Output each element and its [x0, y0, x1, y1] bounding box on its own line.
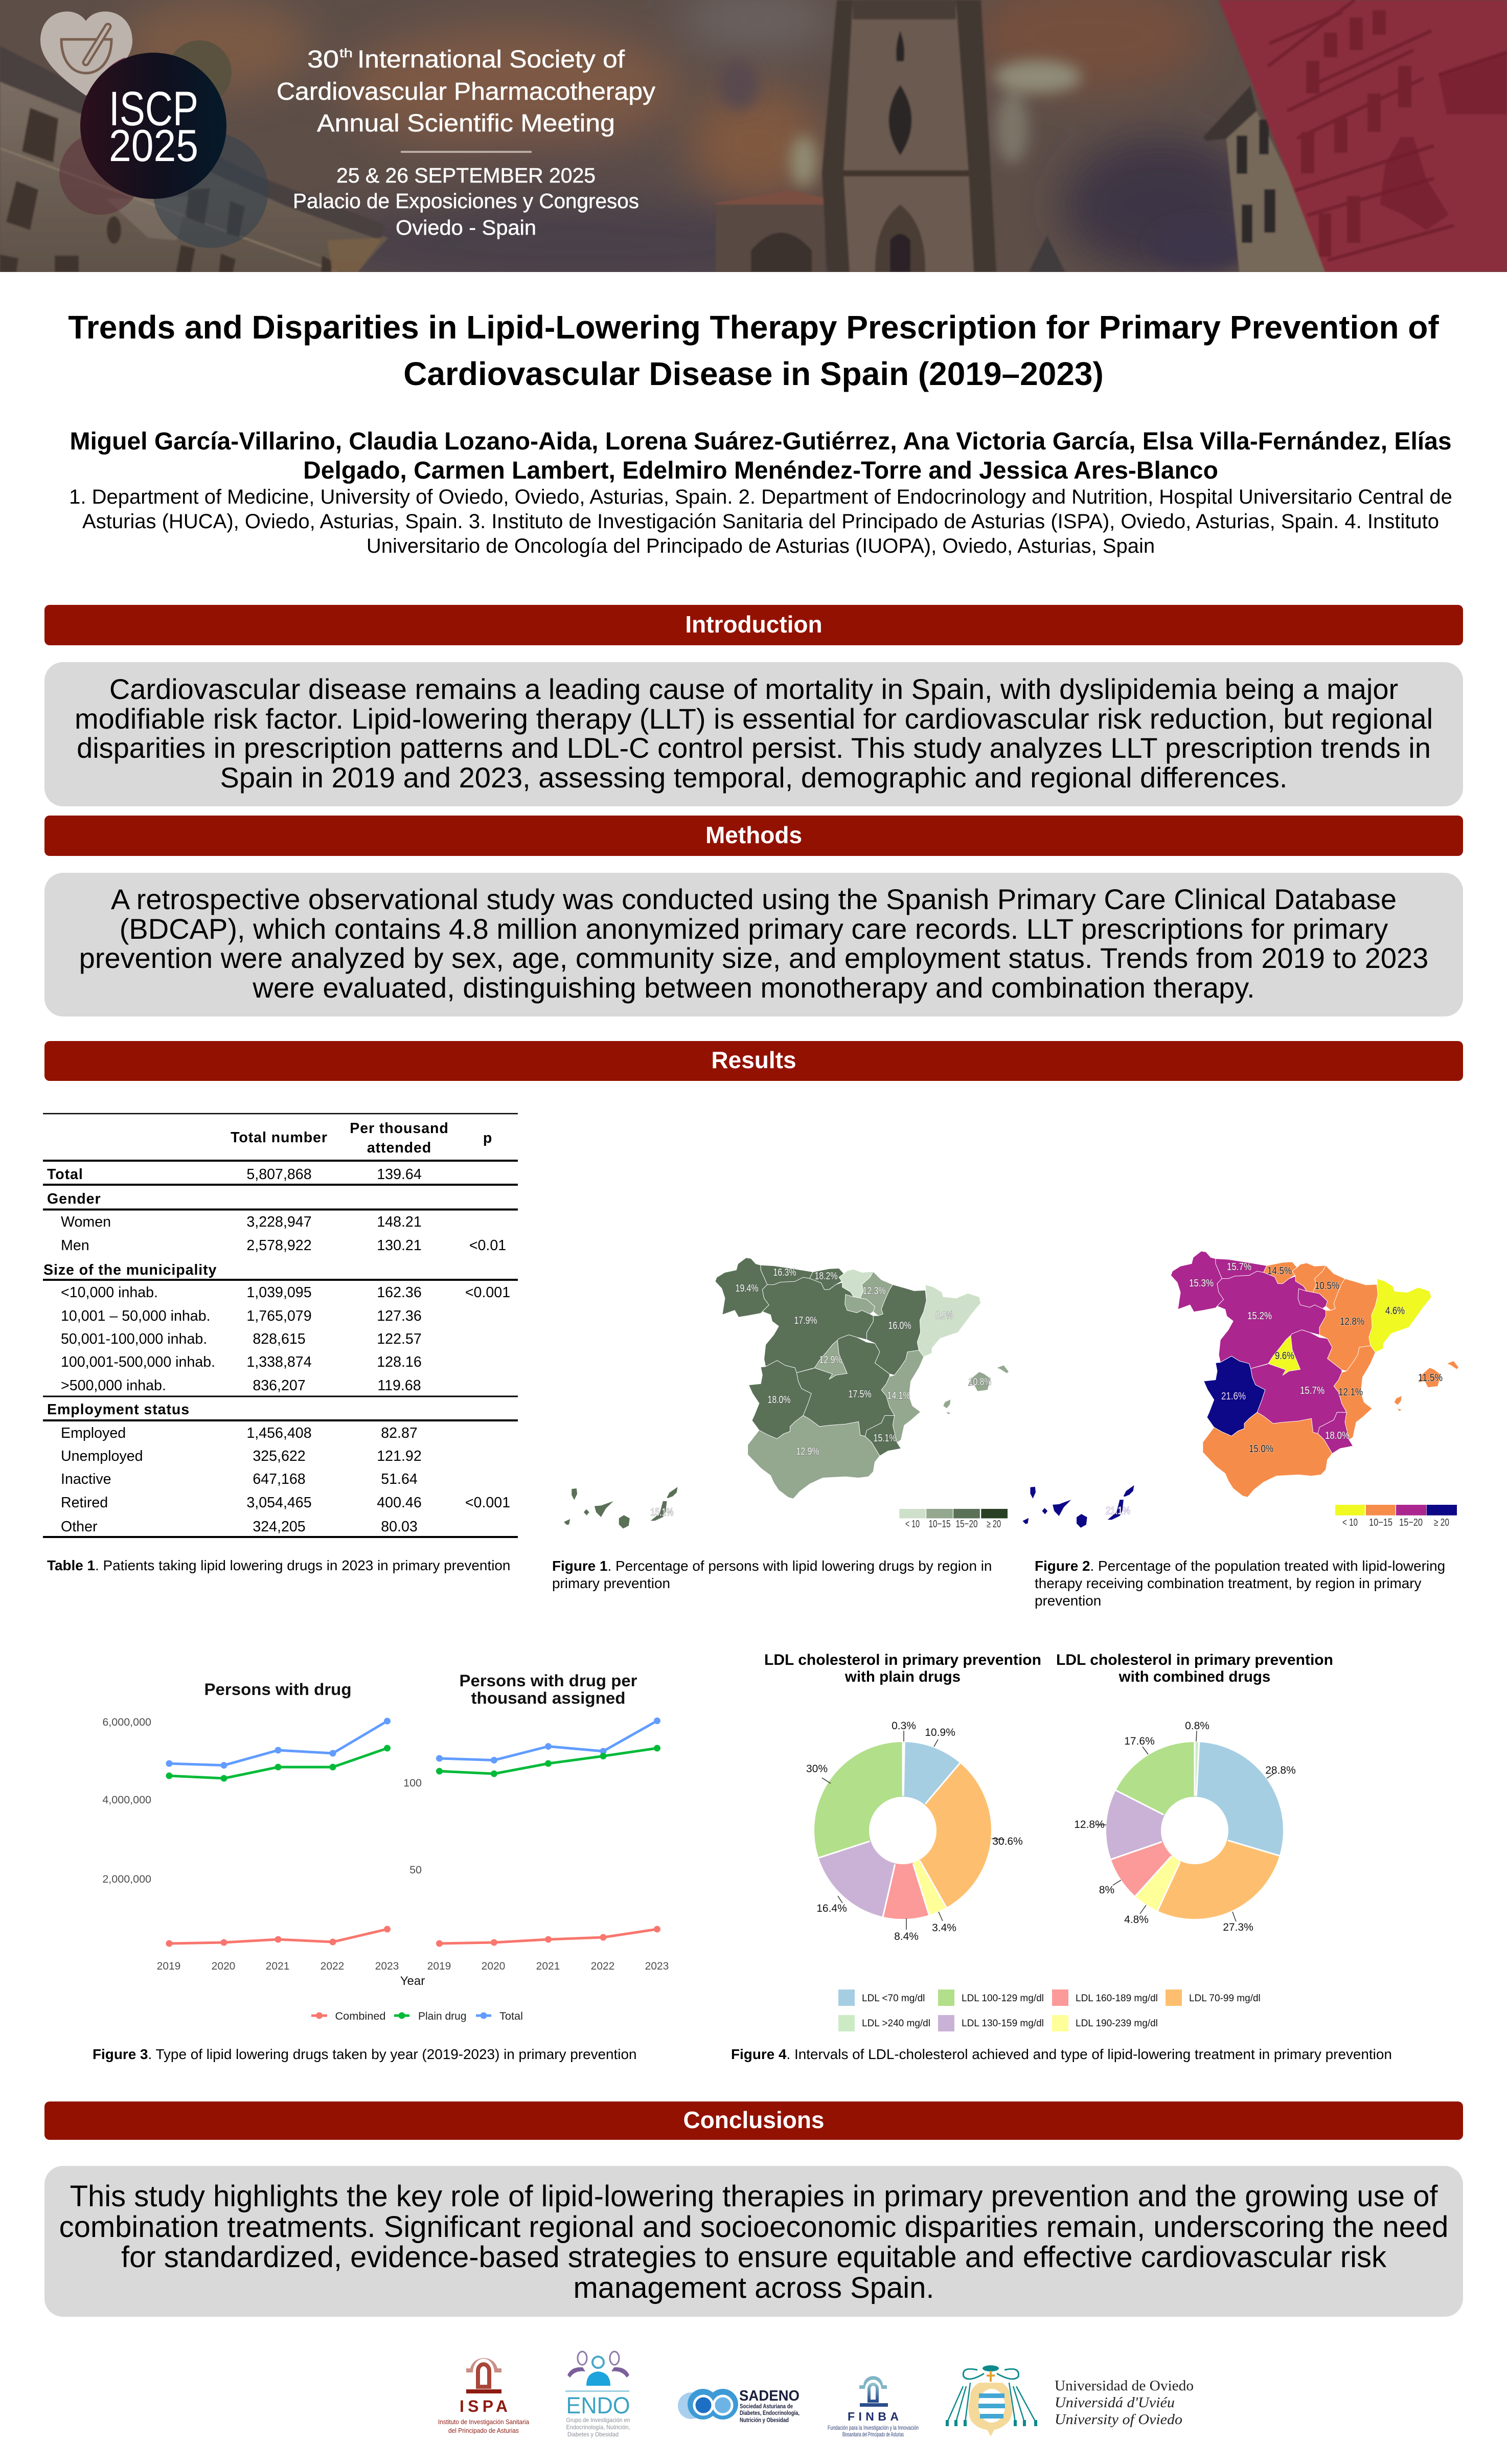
donut labels: plain drugs: 3.4% — [932, 1922, 956, 1934]
table 1: 3,054,465 — [246, 1495, 312, 1511]
table 1: Total — [47, 1166, 83, 1183]
logo: FINBA: Biosanitaria del Principado de Asturias — [842, 2431, 904, 2438]
value labels: 10.5% — [1315, 1280, 1339, 1292]
table 1: 119.68 — [377, 1377, 421, 1394]
figure 4: donut charts — [764, 1652, 1333, 2031]
region: Asturias — [1216, 1259, 1267, 1279]
logo text: ISCP — [109, 82, 198, 136]
value labels: 15.7% — [1300, 1385, 1325, 1396]
logo: ENDO: ENDO — [566, 2392, 630, 2418]
donut labels: plain drugs: 8.4% — [894, 1931, 919, 1942]
heading: introduction — [44, 605, 1463, 645]
value labels: 15.1% — [873, 1433, 897, 1444]
value labels: 12.9% — [796, 1446, 819, 1457]
table 1: 127.36 — [377, 1308, 422, 1324]
map legend: 10−15 — [928, 1519, 951, 1530]
donut labels: combined drugs: 27.3% — [1223, 1922, 1253, 1933]
logo: ENDO: Grupo de Investigación en — [566, 2416, 630, 2424]
ISCP 2025 logo — [40, 11, 268, 248]
table 1: Other — [61, 1519, 98, 1535]
value labels — [1106, 1261, 1443, 1517]
region: Cantabria — [1264, 1262, 1297, 1283]
map legend — [1335, 1505, 1457, 1528]
caption: figure 2: prevention — [1035, 1593, 1101, 1609]
table 1: 400.46 — [377, 1495, 422, 1511]
value labels: 15.1% — [650, 1507, 674, 1518]
logo: ENDO: Diabetes y Obesidad — [567, 2431, 619, 2438]
donut labels: plain drugs: 30.6% — [992, 1836, 1023, 1847]
y axis labels: 2,000,000 — [102, 1873, 151, 1885]
chart legend: Total — [499, 2010, 523, 2022]
value labels: 18.0% — [768, 1394, 791, 1406]
region: Madrid — [814, 1340, 847, 1380]
value labels: 8.9% — [935, 1310, 953, 1321]
table 1: Employed — [61, 1425, 126, 1441]
authors — [70, 428, 1452, 484]
table 1: Men — [61, 1237, 89, 1254]
value labels: 12.3% — [863, 1285, 886, 1297]
x axis labels: 2019 — [157, 1960, 180, 1972]
panel: methods text: A retrospective observational study was conducted using the Spanish Primary Care Clinical Database — [111, 883, 1397, 915]
donut legend — [838, 1990, 1261, 2031]
value labels: 16.3% — [773, 1267, 796, 1278]
value labels: 11.5% — [1418, 1372, 1443, 1384]
map legend: 15−20 — [1399, 1517, 1423, 1528]
caption: figure 1 — [552, 1557, 992, 1592]
heading: introduction: Introduction — [685, 611, 823, 638]
y axis labels: 100 — [403, 1777, 422, 1789]
y axis labels: 4,000,000 — [102, 1794, 151, 1806]
donut labels: combined drugs: 8% — [1099, 1884, 1114, 1896]
affiliations: Universitario de Oncología del Principado de Asturias (IUOPA), Oviedo, Asturias, Spain — [367, 535, 1155, 557]
donut labels: combined drugs: 17.6% — [1124, 1735, 1155, 1747]
conference details: 30 — [307, 46, 339, 73]
x axis labels — [157, 1960, 669, 1972]
left building — [0, 46, 389, 286]
table 1: 324,205 — [253, 1519, 306, 1535]
table 1: attended — [367, 1140, 431, 1156]
table 1: 100,001-500,000 inhab. — [61, 1354, 215, 1370]
value labels: 15.2% — [1247, 1310, 1272, 1322]
table 1: 1,765,079 — [246, 1308, 312, 1324]
region: Basque Country — [1292, 1263, 1326, 1293]
map legend: 15−20 — [956, 1519, 977, 1530]
conference details: th — [339, 47, 353, 60]
region: Asturias — [761, 1265, 813, 1284]
conference details: Palacio de Exposiciones y Congresos — [293, 189, 639, 213]
donut labels: plain drugs: 0.3% — [892, 1720, 916, 1732]
region: Aragon — [866, 1284, 926, 1375]
x axis labels: 2022 — [591, 1960, 614, 1972]
logo text — [109, 82, 198, 171]
title — [68, 309, 1439, 392]
map legend: < 10 — [1342, 1517, 1358, 1528]
region: Extremadura — [1204, 1356, 1265, 1436]
logo: SADENO: SADENO — [739, 2388, 800, 2404]
caption: figure 2: therapy receiving combination treatment, by region in primary — [1035, 1575, 1422, 1591]
heading: methods — [44, 816, 1463, 856]
authors: Delgado, Carmen Lambert, Edelmiro Menéndez-Torre and Jessica Ares-Blanco — [303, 457, 1218, 484]
caption: figure 1: Figure 1. Percentage of persons with lipid lowering drugs by region in — [552, 1558, 992, 1574]
region: Andalusia — [1203, 1412, 1332, 1497]
region: Canary Islands — [1022, 1485, 1134, 1528]
logo: University of Oviedo crest: Universidad de Oviedo — [1055, 2378, 1194, 2394]
heading: methods: Methods — [705, 822, 802, 848]
panel: conclusions text: This study highlights the key role of lipid-lowering therapies in primary prevention and the growing use of — [70, 2180, 1437, 2213]
figure 3: line charts — [102, 1671, 669, 2022]
panel: methods text: prevention were analyzed by sex, age, community size, and employment status. Trends from 2019 to 2023 — [79, 942, 1428, 974]
region: La Rioja — [845, 1295, 875, 1314]
region: Navarra — [1313, 1265, 1345, 1310]
chart title: plain drugs: LDL cholesterol in primary prevention — [764, 1652, 1041, 1668]
logo: SADENO — [678, 2388, 800, 2424]
donut legend: LDL 160-189 mg/dl — [1076, 1993, 1158, 2004]
chart title: persons with drug: Persons with drug — [204, 1680, 352, 1699]
table 1: 2,578,922 — [246, 1237, 312, 1254]
donut legend: LDL 70-99 mg/dl — [1189, 1993, 1261, 2004]
logo: University of Oviedo crest: University of Oviedo — [1055, 2412, 1182, 2428]
table 1: Women — [61, 1214, 111, 1230]
logo: SADENO: Diabetes, Endocrinología, — [740, 2409, 800, 2416]
logo: SADENO: Sociedad Asturiana de — [740, 2403, 793, 2410]
donut: combined drugs — [1134, 1769, 1255, 1892]
chart title: per thousand: Persons with drug per — [459, 1671, 637, 1690]
chart title: combined drugs — [1056, 1652, 1333, 1685]
value labels: 15.7% — [1227, 1261, 1251, 1273]
donut labels: combined drugs: 28.8% — [1265, 1765, 1296, 1776]
region: Balearic Islands — [1395, 1361, 1458, 1411]
region: Galicia — [715, 1258, 769, 1317]
region: Castilla y Leon — [762, 1277, 873, 1373]
axis title: year: Year — [400, 1974, 425, 1988]
region: Basque Country — [839, 1269, 873, 1298]
table 1: Inactive — [61, 1471, 111, 1487]
table 1: 828,615 — [253, 1331, 306, 1347]
value labels: 15.3% — [1189, 1278, 1214, 1289]
table 1: <0.001 — [465, 1495, 510, 1511]
table 1: Unemployed — [61, 1448, 143, 1464]
panel: introduction text: disparities in prescription patterns and LDL-C control persist. This study analyzes LLT prescription trends in — [77, 732, 1431, 764]
panel: introduction text: Spain in 2019 and 2023, assessing temporal, demographic and regional differences. — [220, 761, 1287, 794]
donut labels: plain drugs: 16.4% — [816, 1903, 847, 1914]
panel: conclusions text — [44, 2166, 1463, 2317]
table 1: 162.36 — [377, 1284, 422, 1301]
logo text: 2025 — [109, 120, 198, 171]
table 1: 647,168 — [253, 1471, 306, 1487]
table 1: 121.92 — [377, 1448, 422, 1464]
chart title: combined drugs: with combined drugs — [1118, 1668, 1270, 1685]
panel: conclusions text: management across Spain. — [573, 2271, 934, 2304]
caption: figure 1: primary prevention — [552, 1575, 670, 1591]
x axis labels: 2019 — [427, 1960, 451, 1972]
affiliations: 1. Department of Medicine, University of Oviedo, Oviedo, Asturias, Spain. 2. Department of Endocrinology and Nutrition, Hospital Universitario Central de — [69, 486, 1452, 508]
heading: results: Results — [711, 1047, 796, 1073]
logo: SADENO: Nutrición y Obesidad — [740, 2416, 789, 2424]
conference details: International Society of — [357, 46, 625, 73]
region: Galicia — [1171, 1251, 1224, 1312]
caption: figure 2: Figure 2. Percentage of the population treated with lipid-lowering — [1035, 1558, 1445, 1574]
table 1: 1,456,408 — [246, 1425, 312, 1441]
right building — [1203, 86, 1325, 272]
conference details: Annual Scientific Meeting — [317, 110, 615, 137]
red overlay facade — [1219, 0, 1507, 272]
panel: introduction text: modifiable risk factor. Lipid-lowering therapy (LLT) is essential for cardiovascular risk reduction, but regional — [75, 703, 1433, 735]
donut labels: plain drugs: 30% — [806, 1763, 828, 1775]
value labels: 17.5% — [849, 1389, 872, 1400]
table 1: 1,338,874 — [246, 1354, 312, 1370]
series: left chart — [169, 1721, 387, 1943]
value labels: 17.9% — [794, 1315, 817, 1326]
region: Castilla y Leon — [1217, 1271, 1326, 1369]
value labels: 15.0% — [1249, 1443, 1273, 1455]
table 1: Gender — [47, 1191, 101, 1207]
map legend: ≥ 20 — [987, 1519, 1001, 1530]
logo: University of Oviedo crest: Universidá d'Uviéu — [1055, 2395, 1175, 2411]
table 1: Per thousand — [350, 1120, 449, 1137]
chart title: combined drugs: LDL cholesterol in primary prevention — [1056, 1652, 1333, 1668]
region: Valencia — [1334, 1346, 1375, 1440]
logo: ISPA: Instituto de Investigación Sanitaria — [438, 2418, 530, 2426]
logo: ENDO — [565, 2352, 630, 2438]
conference details: Cardiovascular Pharmacotherapy — [277, 78, 655, 105]
table 1: 3,228,947 — [246, 1214, 312, 1230]
table 1: >500,000 inhab. — [61, 1377, 166, 1394]
region: Extremadura — [749, 1361, 811, 1439]
y axis labels — [102, 1716, 422, 1885]
heading: conclusions — [44, 2101, 1463, 2140]
chart title: per thousand — [459, 1671, 637, 1707]
value labels: 14.1% — [887, 1390, 910, 1401]
table 1: <10,000 inhab. — [61, 1284, 158, 1301]
map legend — [899, 1509, 1008, 1530]
donut labels: combined drugs — [1074, 1720, 1296, 1933]
panel: methods text: (BDCAP), which contains 4.8 million anonymized primary care records. LLT prescriptions for primary — [120, 913, 1388, 945]
donut: plain drugs — [841, 1769, 964, 1892]
heading: conclusions: Conclusions — [683, 2107, 825, 2133]
value labels: 12.9% — [819, 1354, 842, 1366]
x axis labels: 2021 — [266, 1960, 289, 1972]
donut labels: plain drugs — [806, 1720, 1023, 1942]
donut labels: plain drugs: 10.9% — [925, 1727, 955, 1738]
chart legend: Combined — [335, 2010, 385, 2022]
donut legend: LDL <70 mg/dl — [862, 1993, 925, 2004]
chart title: plain drugs: with plain drugs — [844, 1668, 961, 1685]
icon: heart with mortar — [40, 11, 132, 96]
y axis labels: 50 — [409, 1864, 422, 1876]
donut legend: LDL >240 mg/dl — [862, 2018, 930, 2029]
conference details: 25 & 26 SEPTEMBER 2025 — [336, 164, 596, 187]
panel: methods text — [44, 873, 1463, 1016]
table 1: Employment status — [47, 1401, 190, 1418]
table 1: 10,001 – 50,000 inhab. — [61, 1308, 211, 1324]
table 1: 130.21 — [377, 1237, 422, 1254]
region: Murcia — [1318, 1412, 1353, 1454]
table 1: 82.87 — [381, 1425, 418, 1441]
value labels: 21.6% — [1221, 1391, 1246, 1402]
figure 1: map of Spain, persons with lipid lowering drugs — [564, 1258, 1009, 1530]
title: Cardiovascular Disease in Spain (2019–2023) — [403, 355, 1104, 392]
x axis labels: 2020 — [212, 1960, 235, 1972]
affiliations: Asturias (HUCA), Oviedo, Asturias, Spain. 3. Instituto de Investigación Sanitaria del Principado de Asturias (ISPA), Oviedo, Asturias, Spain. 4. Instituto — [82, 510, 1439, 533]
value labels: 18.2% — [815, 1271, 838, 1282]
table 1: 51.64 — [381, 1471, 418, 1487]
donut legend: LDL 190-239 mg/dl — [1076, 2018, 1158, 2029]
caption: table 1: Table 1. Patients taking lipid lowering drugs in 2023 in primary prevention — [47, 1557, 510, 1573]
logo: ISPA: del Principado de Asturias — [448, 2427, 519, 2434]
x axis labels: 2023 — [645, 1960, 669, 1972]
value labels: 18.0% — [1325, 1430, 1350, 1441]
region: Murcia — [865, 1415, 901, 1456]
affiliations — [69, 486, 1452, 557]
cathedral tower — [716, 0, 1065, 272]
logo: FINBA: Fundación para la Investigación y la Innovación — [828, 2424, 919, 2431]
region: Canary Islands — [564, 1487, 678, 1529]
panel: methods text: were evaluated, distinguishing between monotherapy and combination therapy. — [253, 971, 1255, 1004]
x axis labels: 2023 — [375, 1960, 399, 1972]
region: Cantabria — [810, 1268, 844, 1290]
value labels — [650, 1267, 992, 1518]
donut labels: combined drugs: 4.8% — [1124, 1914, 1149, 1926]
table 1: 5,807,868 — [246, 1166, 312, 1183]
map legend: ≥ 20 — [1434, 1517, 1449, 1528]
y axis labels: 6,000,000 — [102, 1716, 151, 1728]
value labels: 9.6% — [1275, 1350, 1294, 1362]
donut labels: combined drugs: 0.8% — [1185, 1720, 1209, 1732]
table 1: 80.03 — [381, 1519, 418, 1535]
map legend: < 10 — [905, 1519, 920, 1530]
logo: FINBA — [828, 2376, 919, 2438]
table 1: Total number — [231, 1129, 328, 1146]
region: Catalonia — [1369, 1279, 1431, 1352]
heading: results — [44, 1041, 1463, 1081]
chart legend: Plain drug — [418, 2010, 466, 2022]
region: Valencia — [881, 1350, 924, 1442]
region: Balearic Islands — [943, 1365, 1009, 1414]
table 1: 325,622 — [253, 1448, 306, 1464]
region: Catalonia — [917, 1284, 981, 1357]
table 1: <0.001 — [465, 1284, 510, 1301]
table 1: <0.01 — [469, 1237, 506, 1254]
authors: Miguel García-Villarino, Claudia Lozano-Aida, Lorena Suárez-Gutiérrez, Ana Victoria García, Elsa Villa-Fernández, Elías — [70, 428, 1452, 455]
panel: introduction text: Cardiovascular disease remains a leading cause of mortality in Spain, with dyslipidemia being a major — [109, 673, 1398, 705]
chart title: plain drugs — [764, 1652, 1041, 1685]
donut legend: LDL 100-129 mg/dl — [962, 1993, 1044, 2004]
title: Trends and Disparities in Lipid-Lowering Therapy Prescription for Primary Prevention of — [68, 309, 1439, 346]
chart legend — [311, 2010, 523, 2022]
table 1: 128.16 — [377, 1354, 422, 1370]
value labels: 10.8% — [968, 1376, 992, 1388]
value labels: 19.4% — [735, 1283, 759, 1294]
table 1: 148.21 — [377, 1214, 422, 1230]
panel: conclusions text: combination treatments. Significant regional and socioeconomic disparities remain, underscoring the need — [59, 2210, 1448, 2244]
x axis labels: 2021 — [536, 1960, 560, 1972]
value labels: 21.1% — [1106, 1505, 1130, 1517]
table 1: 836,207 — [253, 1377, 306, 1394]
value labels: 12.1% — [1338, 1387, 1363, 1398]
table 1 — [43, 1114, 518, 1537]
table 1: Size of the municipality — [43, 1262, 217, 1278]
logo: ISPA — [438, 2358, 530, 2434]
logo: University of Oviedo crest — [946, 2365, 1194, 2436]
conference details: Oviedo - Spain — [396, 216, 536, 239]
table 1: 50,001-100,000 inhab. — [61, 1331, 207, 1347]
chart title: per thousand: thousand assigned — [471, 1689, 626, 1707]
region: Aragon — [1319, 1279, 1378, 1371]
region: Andalusia — [748, 1415, 880, 1499]
value labels: 16.0% — [888, 1320, 911, 1331]
figure 2: map of Spain, combination treatment — [1022, 1251, 1458, 1528]
table 1: Retired — [61, 1495, 108, 1511]
x axis labels: 2022 — [321, 1960, 344, 1972]
x axis labels: 2020 — [482, 1960, 505, 1972]
logo: FINBA: FINBA — [848, 2410, 899, 2423]
caption: figure 2 — [1035, 1557, 1445, 1610]
table 1: p — [483, 1130, 492, 1146]
table 1: 1,039,095 — [246, 1284, 312, 1301]
map legend: 10−15 — [1369, 1517, 1392, 1528]
value labels: 14.5% — [1267, 1265, 1292, 1277]
region: Castilla-La Mancha — [796, 1335, 895, 1436]
donut legend: LDL 130-159 mg/dl — [962, 2018, 1044, 2029]
region: Madrid — [1268, 1336, 1300, 1375]
region: La Rioja — [1298, 1288, 1328, 1308]
value labels: 12.8% — [1340, 1316, 1364, 1327]
region: Navarra — [860, 1272, 893, 1316]
header banner — [0, 0, 1507, 291]
logo: ISPA: ISPA — [460, 2397, 508, 2415]
panel: conclusions text: for standardized, evidence-based strategies to ensure equitable and effective cardiovascular risk — [121, 2241, 1386, 2274]
logo: ENDO: Endocrinología, Nutrición, — [566, 2424, 630, 2431]
donut labels: combined drugs: 12.8% — [1074, 1819, 1105, 1830]
conference details — [277, 46, 655, 239]
caption: figure 3: Figure 3. Type of lipid lowering drugs taken by year (2019-2023) in primary prevention — [93, 2046, 637, 2062]
value labels: 4.6% — [1385, 1305, 1405, 1317]
region: Castilla-La Mancha — [1251, 1330, 1346, 1434]
series: right chart — [440, 1721, 657, 1943]
caption: figure 4: Figure 4. Intervals of LDL-cholesterol achieved and type of lipid-lowering treatment in primary prevention — [731, 2046, 1392, 2062]
table 1: 122.57 — [377, 1331, 422, 1347]
panel: introduction text — [44, 662, 1463, 806]
table 1: 139.64 — [377, 1166, 422, 1183]
